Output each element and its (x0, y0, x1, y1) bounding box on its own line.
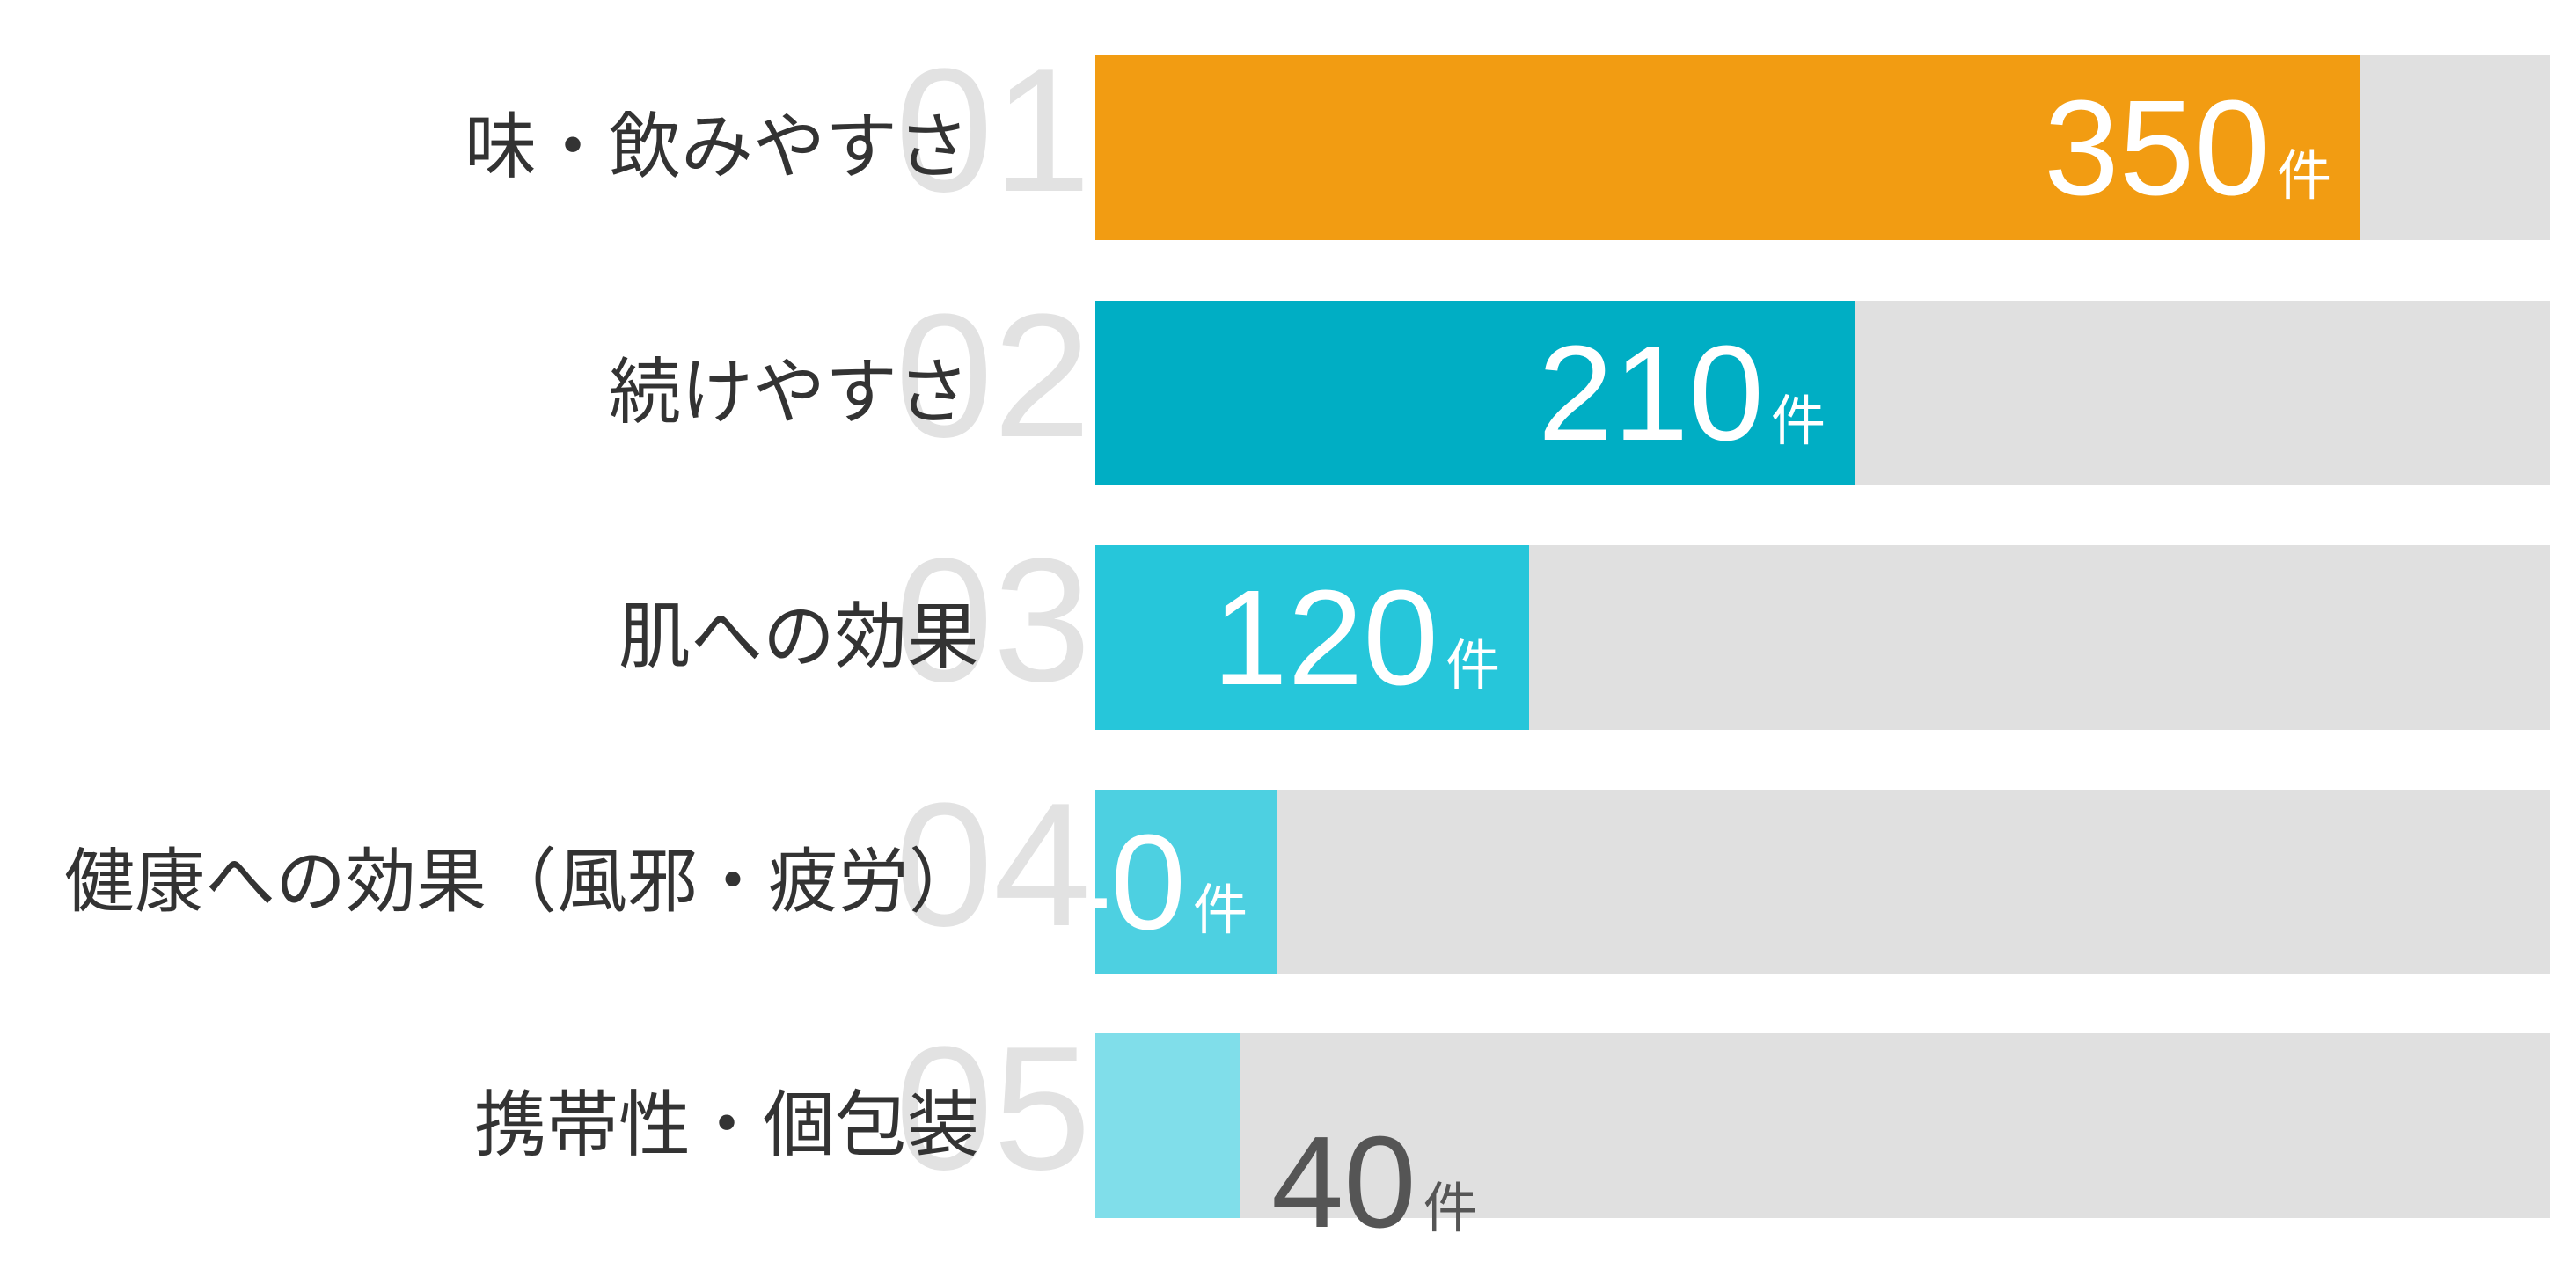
bar 210: 210件 (1538, 317, 1826, 469)
row 5 (474, 1010, 2550, 1255)
label: 携帯性・個包装: 携帯性・個包装 (474, 1085, 979, 1165)
label: 続けやすさ: 続けやすさ (609, 353, 970, 433)
row 3 (618, 522, 2550, 730)
rank number 04: 04 (896, 767, 1091, 963)
label: 健康への効果: 健康への効果（風邪・疲労） (64, 843, 979, 921)
row 4 (64, 767, 2550, 974)
rank number 03: 03 (896, 522, 1091, 719)
label: 肌への効果: 肌への効果 (618, 597, 979, 677)
bar 40 (1095, 1033, 2550, 1218)
rank number 02: 02 (896, 278, 1091, 474)
bar 350 (1095, 55, 2550, 240)
bar 40 (value clipped) (1095, 790, 2550, 974)
bar 210 (1095, 301, 2550, 485)
label: 味・飲みやすさ: 味・飲みやすさ (465, 107, 970, 187)
row 1 (465, 33, 2550, 240)
rank number 01: 01 (896, 33, 1091, 229)
bar 120: 120件 (1212, 562, 1500, 713)
value 40件 outside bar: 40件 (1271, 1110, 1478, 1255)
row 2 (609, 278, 2550, 485)
bar 350: 350件 (2044, 72, 2331, 223)
rank number 05: 05 (896, 1010, 1091, 1207)
bar 120 (1095, 545, 2550, 730)
